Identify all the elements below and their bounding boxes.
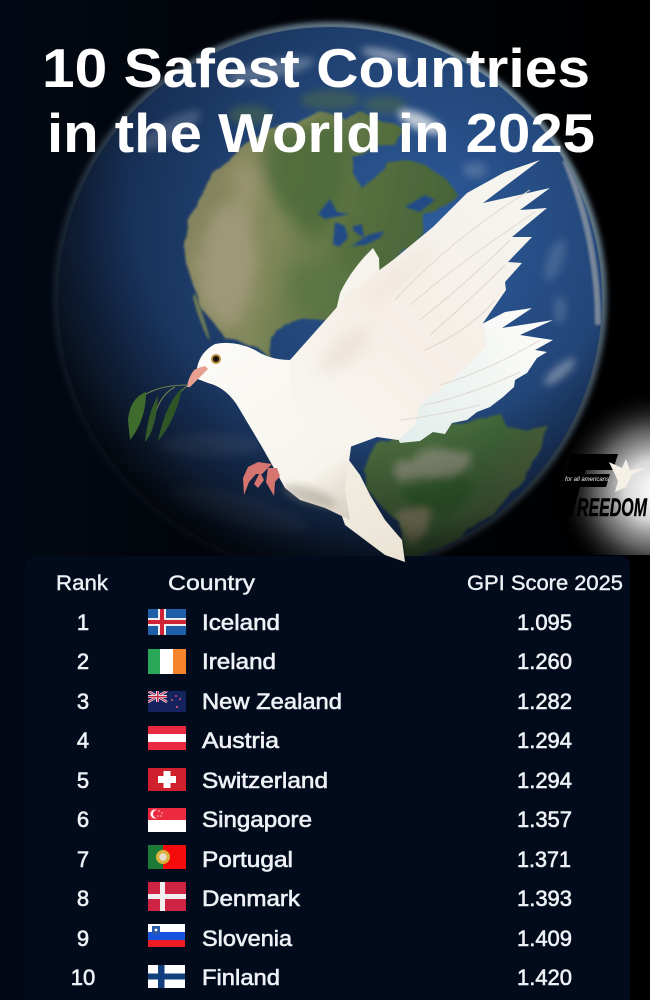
- row: New Zealand: 1.282: [517, 689, 572, 714]
- row: Singapore: Singapore: [202, 807, 312, 832]
- flag: New Zealand: [148, 691, 186, 712]
- baja california: [193, 293, 210, 340]
- row: Portugal: 1.371: [517, 847, 571, 872]
- logo: Freedom: [540, 385, 650, 555]
- title: [42, 37, 595, 164]
- flag: Iceland: [148, 609, 186, 635]
- row: Finland: [71, 965, 572, 990]
- underbody shadow: [281, 480, 339, 512]
- row: Switzerland: [77, 768, 572, 793]
- row: Finland: Finland: [202, 965, 280, 990]
- row: Austria: [77, 726, 572, 753]
- south america: [363, 413, 548, 560]
- table header: GPI Score 2025: [467, 572, 623, 595]
- right limb highlight: [565, 160, 598, 325]
- row: Denmark: Denmark: [202, 886, 301, 911]
- atmosphere glow: [57, 26, 603, 572]
- row: New Zealand: 3: [77, 689, 89, 714]
- beak: [187, 366, 208, 387]
- eye: [211, 354, 221, 364]
- main wing: [290, 160, 550, 448]
- row: Austria: 4: [77, 728, 89, 753]
- row: Ireland: 2: [77, 649, 89, 674]
- flag: Slovenia: [148, 924, 185, 947]
- row: Switzerland: 1.294: [517, 768, 572, 793]
- row: Austria: Austria: [202, 728, 280, 753]
- row: Denmark: 1.393: [517, 886, 572, 911]
- row: Portugal: Portugal: [202, 847, 293, 872]
- row: Ireland: 1.260: [517, 649, 572, 674]
- table header: Country: [168, 572, 256, 595]
- logo letter F: [555, 454, 618, 517]
- row: Slovenia: [77, 924, 572, 951]
- north america: [183, 112, 458, 358]
- row: Iceland: Iceland: [202, 610, 280, 635]
- globe shading: [58, 146, 597, 556]
- feather lines: [395, 190, 540, 420]
- row: Singapore: 1.357: [517, 807, 572, 832]
- row: Finland: 1.420: [517, 965, 572, 990]
- logo tagline: for all americans: [565, 476, 610, 483]
- row: Denmark: [77, 882, 572, 911]
- row: Portugal: 7: [77, 847, 89, 872]
- tail: [338, 448, 405, 562]
- flag: Switzerland: [148, 768, 186, 791]
- row: Singapore: [77, 807, 572, 832]
- table header: Rank: [56, 572, 109, 595]
- row: Portugal: [77, 845, 571, 872]
- panel: ranking table: [25, 556, 630, 1000]
- row: Switzerland: Switzerland: [202, 768, 328, 793]
- row: New Zealand: New Zealand: [202, 689, 342, 714]
- row: Iceland: 1.095: [517, 610, 572, 635]
- great lakes: [318, 195, 435, 247]
- flag: Portugal: [148, 845, 186, 869]
- row: New Zealand: [77, 691, 572, 712]
- logo dove: [609, 459, 645, 492]
- row: Finland: 10: [71, 965, 95, 990]
- table header: [56, 572, 623, 595]
- row: Switzerland: 5: [77, 768, 89, 793]
- title: 10 Safest Countries: [42, 37, 590, 99]
- row: Slovenia: 9: [77, 926, 89, 951]
- feet: [243, 462, 280, 496]
- wing shoulder tint: [313, 242, 438, 380]
- olive branch: [128, 385, 187, 442]
- arctic islands: [228, 90, 407, 125]
- flag: Finland: [148, 965, 185, 988]
- back wing: [335, 248, 380, 315]
- globe: [57, 26, 603, 572]
- title: in the World in 2025: [47, 102, 595, 164]
- row: Singapore: 6: [77, 807, 89, 832]
- row: Austria: 1.294: [517, 728, 572, 753]
- table background: [25, 556, 630, 1000]
- row: Iceland: [77, 609, 572, 635]
- flag: Singapore: [148, 808, 186, 832]
- row: Ireland: Ireland: [202, 649, 276, 674]
- body and head: [195, 343, 352, 520]
- row: Denmark: 8: [77, 886, 89, 911]
- illustration: white dove: [128, 160, 553, 562]
- row: Slovenia: Slovenia: [202, 926, 293, 951]
- flag: Austria: [148, 726, 186, 750]
- logo glow: [540, 385, 650, 555]
- flag: Ireland: [148, 649, 186, 674]
- row: Slovenia: 1.409: [517, 926, 572, 951]
- row: Iceland: 1: [77, 610, 89, 635]
- row: Ireland: [77, 649, 572, 674]
- flag: Denmark: [148, 882, 186, 911]
- ocean: [58, 27, 602, 571]
- clouds: [135, 45, 579, 543]
- tail fan feathers: [380, 308, 553, 443]
